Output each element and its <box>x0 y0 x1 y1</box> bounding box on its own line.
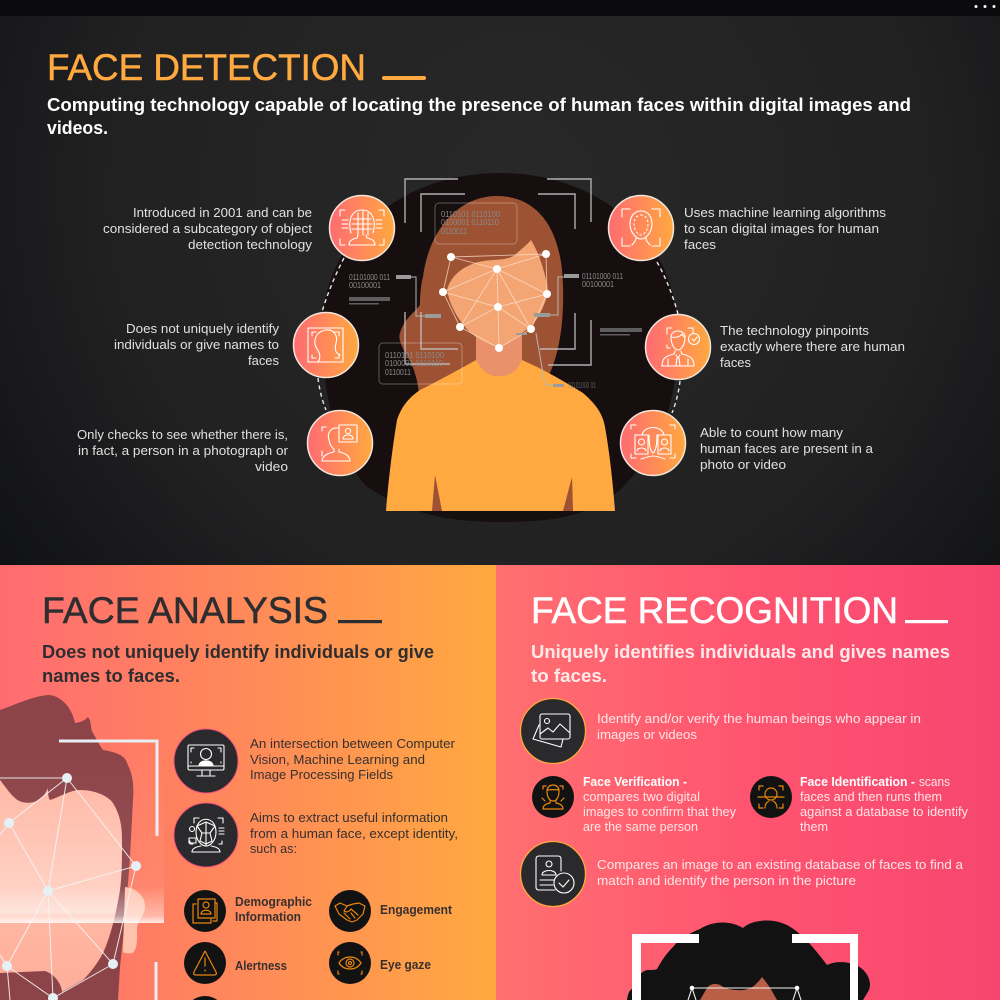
data boxes: 01101000 011 <box>582 272 623 281</box>
icon: face with analysis nodes <box>174 803 238 867</box>
icon: document with check <box>520 842 586 906</box>
text: detection facts right: to scan digital images for human <box>684 221 879 236</box>
text: face identification: Face Identification - <box>800 775 915 789</box>
scan overlay <box>0 741 164 923</box>
face mesh <box>0 773 141 1000</box>
subtitle: face recognition <box>531 641 950 686</box>
text: recognition descriptions <box>597 711 964 888</box>
subtitle: face detection: Computing technology capable of locating the presence of human faces within digital images and <box>47 94 911 115</box>
data boxes: 0100001 0110110 <box>441 218 500 227</box>
data boxes: 0100001 0110110 <box>385 359 444 368</box>
subtitle: face analysis <box>42 641 434 686</box>
text: detection facts left: individuals or give names to <box>114 337 279 352</box>
text: detection facts left: considered a subcategory of object <box>103 221 312 236</box>
subtitle: face recognition: to faces. <box>531 665 607 686</box>
text: detection facts left: in fact, a person in a photograph or <box>78 443 289 458</box>
text: detection facts right: Able to count how many <box>700 425 844 440</box>
text: recognition descriptions: Identify and/or verify the human beings who appear in <box>597 711 921 726</box>
text: analysis attributes: Eye gaze <box>380 958 431 972</box>
text: face verification: images to confirm that they <box>583 805 737 819</box>
heading: face recognition: FACE RECOGNITION <box>531 590 898 631</box>
text: analysis descriptions: Vision, Machine Learning and <box>250 752 425 767</box>
subtitle: face detection: videos. <box>47 117 108 138</box>
data boxes: 00100001 <box>582 280 614 289</box>
text: detection facts left: Only checks to see whether there is, <box>77 427 288 442</box>
text: detection facts right: photo or video <box>700 457 786 472</box>
heading: face analysis: FACE ANALYSIS <box>42 590 328 631</box>
icon: partially visible circle <box>184 996 226 1000</box>
icon: face outline dots <box>608 196 674 260</box>
subtitle: face detection <box>47 94 911 138</box>
panel: face analysis <box>0 565 496 1000</box>
subtitle: face analysis: Does not uniquely identify individuals or give <box>42 641 434 662</box>
icon: face grid scan <box>330 196 394 260</box>
text: analysis descriptions: from a human face, except identity, <box>250 826 458 841</box>
panel: face detection <box>0 16 1000 565</box>
text: detection facts right: faces <box>720 355 751 370</box>
text: detection facts right: faces <box>684 237 717 252</box>
icon: person and id card <box>308 410 372 476</box>
illustration: woman with face mesh <box>322 173 677 522</box>
text: analysis attributes: Demographic <box>235 895 312 909</box>
text: analysis descriptions: such as: <box>250 841 297 856</box>
text: detection facts right: The technology pinpoints <box>720 323 870 338</box>
dashed connecting arcs <box>318 258 680 413</box>
text: recognition descriptions: match and identify the person in the picture <box>597 873 856 888</box>
text: analysis descriptions: Image Processing Fields <box>250 767 393 782</box>
text: detection facts left: video <box>255 459 288 474</box>
text: analysis descriptions: An intersection between Computer <box>250 736 456 751</box>
icon: alertness warning <box>184 942 226 984</box>
icon: faces counted on cards <box>620 410 686 476</box>
text: analysis attributes: Information <box>235 910 301 924</box>
icon: man with check <box>646 314 710 380</box>
heading: face detection: FACE DETECTION <box>47 47 366 88</box>
subtitle: face recognition: Uniquely identifies individuals and gives names <box>531 641 950 662</box>
text: face identification: faces and then runs them <box>800 790 942 804</box>
icon: demographic information <box>184 890 226 932</box>
text: detection facts right <box>684 205 905 472</box>
scan brackets <box>59 741 157 1000</box>
illustration: woman with curly hair <box>627 921 870 1000</box>
text: face verification: compares two digital <box>583 790 700 804</box>
text: detection facts left: Introduced in 2001 and can be <box>133 205 312 220</box>
text: detection facts left: detection technology <box>188 237 313 252</box>
text: analysis attributes: Alertness <box>235 959 287 973</box>
icon: eye gaze <box>329 942 371 984</box>
data boxes: 01101000 01 <box>568 381 596 390</box>
text: face verification <box>583 775 737 834</box>
text: recognition descriptions: Compares an image to an existing database of faces to find a <box>597 857 964 872</box>
text: analysis attributes <box>235 895 453 973</box>
icon: engagement handshake <box>329 890 371 932</box>
data boxes: 0110101 0110100 <box>441 210 501 219</box>
icon: face identification <box>750 776 792 818</box>
data boxes: 01101000 011 <box>349 273 390 282</box>
text: detection facts right: exactly where there are human <box>720 339 905 354</box>
text: detection facts left: Does not uniquely identify <box>126 321 280 336</box>
icon: monitor with face <box>174 729 238 793</box>
text: face identification: against a database to identify <box>800 805 969 819</box>
panel: face recognition <box>496 565 1000 1000</box>
text: face identification: scans <box>919 775 950 789</box>
text: analysis descriptions <box>250 736 458 856</box>
text: face verification: are the same person <box>583 820 698 834</box>
top strip <box>0 0 1000 16</box>
text: detection facts right: human faces are present in a <box>700 441 874 456</box>
subtitle: face analysis: names to faces. <box>42 665 180 686</box>
data boxes <box>349 203 623 390</box>
text: detection facts left: faces <box>248 353 279 368</box>
scan brackets <box>405 179 591 365</box>
text: face identification <box>800 775 969 834</box>
face mesh <box>439 250 551 352</box>
text: detection facts right: Uses machine learning algorithms <box>684 205 887 220</box>
text: face verification: Face Verification - <box>583 775 687 789</box>
data boxes: 0110011 <box>441 227 467 236</box>
data boxes: 00100001 <box>349 281 381 290</box>
text: detection facts left <box>77 205 313 474</box>
icon: photos <box>520 698 586 764</box>
data boxes: 0110101 0110100 <box>385 351 445 360</box>
face mesh <box>688 986 801 1000</box>
text: analysis attributes: Engagement <box>380 903 453 917</box>
connector lines and bars <box>349 274 642 387</box>
text: analysis descriptions: Aims to extract useful information <box>250 810 448 825</box>
data boxes: 0110011 <box>385 368 411 377</box>
text: recognition descriptions: images or videos <box>597 727 697 742</box>
text: face identification: them <box>800 820 828 834</box>
icon: face verification <box>532 776 574 818</box>
illustration: man with face mesh <box>0 695 164 1000</box>
icon: head profile frame <box>294 312 358 378</box>
